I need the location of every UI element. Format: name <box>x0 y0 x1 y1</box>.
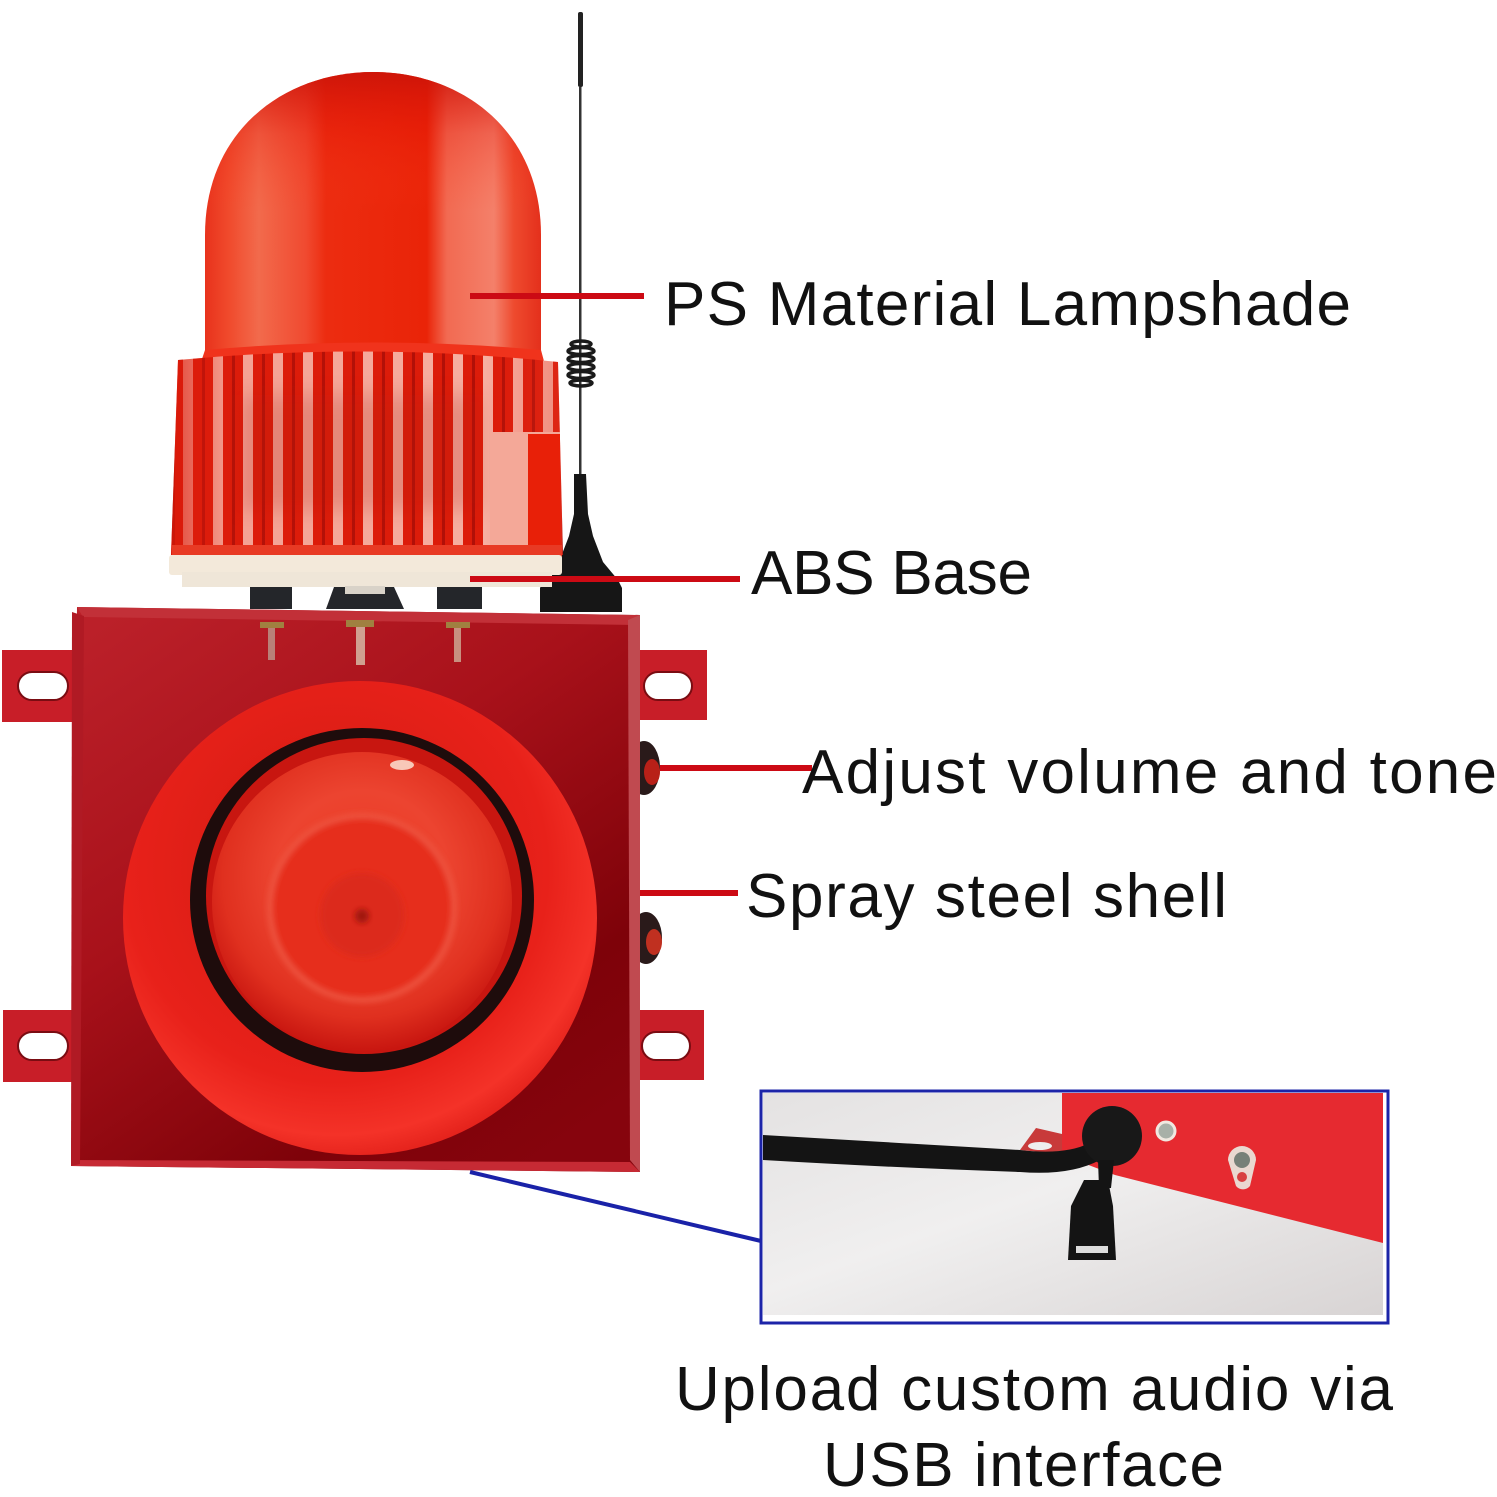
callout line: lampshade <box>470 293 644 299</box>
label: lampshade: PS Material Lampshade <box>664 270 1351 339</box>
lampshade <box>200 72 545 365</box>
inset photo: USB port <box>761 1091 1388 1323</box>
callout line: base <box>470 576 740 582</box>
callout line: shell <box>640 890 738 896</box>
label: shell: Spray steel shell <box>746 862 1227 931</box>
steel box <box>71 607 640 1172</box>
caption: USB upload <box>675 1355 1394 1497</box>
ribbed lamp band <box>171 351 563 559</box>
lamp base <box>169 555 562 609</box>
antenna <box>540 12 622 612</box>
caption: USB upload: Upload custom audio via <box>675 1355 1394 1424</box>
label: volume: Adjust volume and tone <box>802 738 1497 807</box>
mounting tabs <box>2 650 707 1082</box>
callout line: USB <box>470 1172 761 1241</box>
callout line: volume <box>660 765 812 771</box>
horn speaker <box>123 681 597 1155</box>
label: base: ABS Base <box>751 539 1032 608</box>
side buttons <box>628 741 662 964</box>
